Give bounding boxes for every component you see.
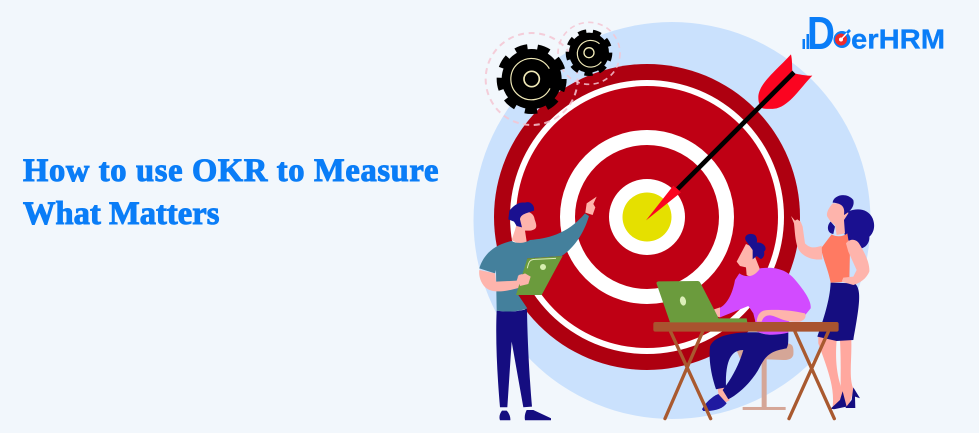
title: What Matters — [23, 196, 219, 232]
shoes — [499, 410, 551, 420]
desk — [653, 322, 839, 419]
gears — [486, 22, 620, 125]
arrow — [646, 54, 812, 220]
seated man — [702, 234, 811, 411]
logo target — [834, 29, 851, 48]
legs — [496, 309, 532, 407]
target board — [494, 64, 800, 370]
title: How to use OKR to Measure — [23, 153, 439, 189]
background circle — [474, 22, 870, 419]
team at desk — [653, 195, 874, 419]
logo name: D — [807, 7, 835, 59]
small gear — [568, 32, 610, 73]
woman — [791, 195, 874, 409]
stool — [737, 343, 793, 410]
tablet — [516, 256, 563, 295]
hair — [508, 202, 534, 227]
logo — [802, 7, 945, 59]
logo suffix: erHRM — [851, 24, 945, 54]
logo bars — [802, 34, 809, 49]
skin neck and head — [512, 211, 536, 243]
large gear — [500, 48, 563, 110]
arm and hand — [479, 270, 531, 291]
laptop — [656, 281, 747, 322]
teal shirt — [479, 213, 589, 312]
title — [22, 153, 439, 232]
person with tablet — [479, 197, 597, 420]
